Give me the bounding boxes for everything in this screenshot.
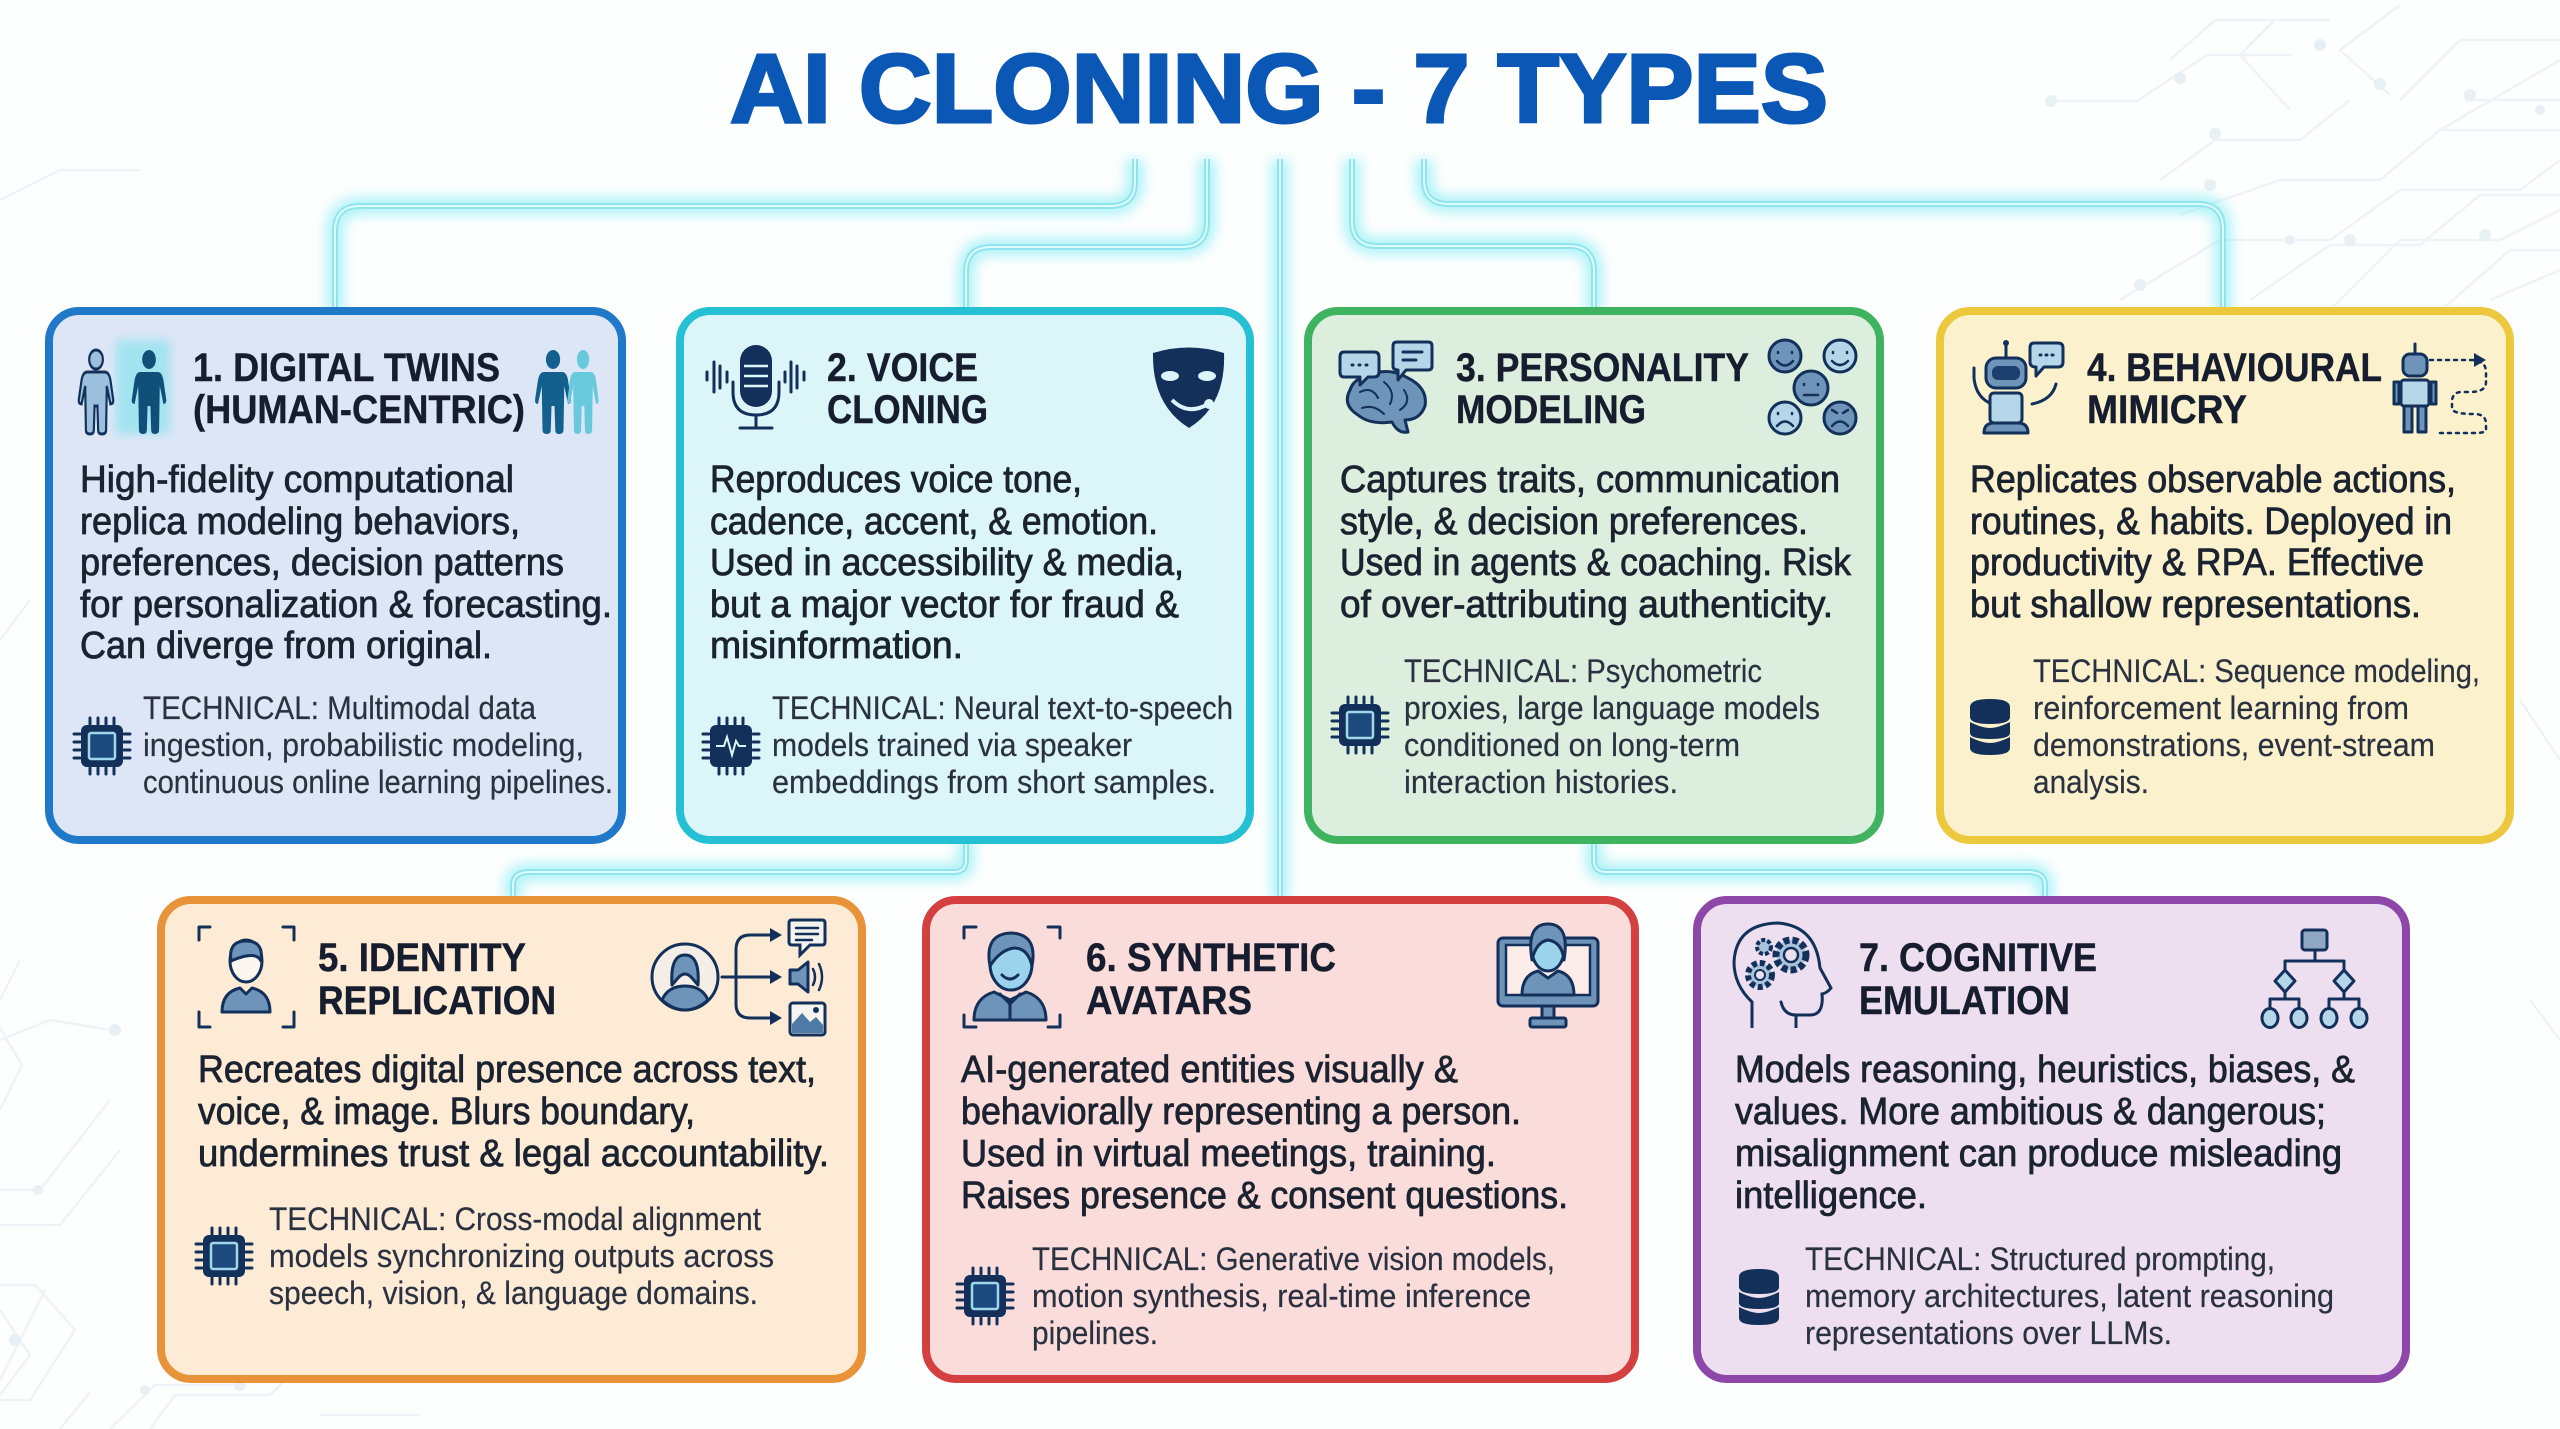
description: Captures traits, communication xyxy=(1340,459,1840,501)
technical note: reinforcement learning from xyxy=(2033,690,2409,726)
heading: AVATARS xyxy=(1086,979,1252,1023)
connector: title to digital twins xyxy=(335,159,1135,312)
description xyxy=(198,1049,829,1175)
description: routines, & habits. Deployed in xyxy=(1970,501,2452,543)
heading: 2. VOICE xyxy=(827,346,978,390)
heading xyxy=(193,346,525,432)
heading: 4. BEHAVIOURAL xyxy=(2087,346,2382,390)
heading: 3. PERSONALITY xyxy=(1456,346,1749,390)
description xyxy=(710,459,1184,667)
panel: 2. voice cloning xyxy=(680,311,1250,840)
technical note: models synchronizing outputs across xyxy=(269,1238,774,1274)
icon: database xyxy=(1970,699,2010,755)
icon: avatar in scan frame xyxy=(964,927,1060,1027)
description: undermines trust & legal accountability. xyxy=(198,1133,829,1175)
description: misalignment can produce misleading xyxy=(1735,1133,2342,1175)
description: Replicates observable actions, xyxy=(1970,459,2456,501)
technical note: analysis. xyxy=(2033,764,2149,800)
description: behaviorally representing a person. xyxy=(961,1091,1521,1133)
technical note: TECHNICAL: Multimodal data xyxy=(143,690,536,726)
icon: twin figures xyxy=(535,350,599,434)
technical note: TECHNICAL: Structured prompting, xyxy=(1805,1241,2275,1277)
icon: emotion faces xyxy=(1769,340,1856,434)
icon: chip xyxy=(957,1268,1013,1324)
technical note: conditioned on long-term xyxy=(1404,727,1740,763)
description: intelligence. xyxy=(1735,1175,1927,1217)
icon: brain with speech bubbles xyxy=(1340,342,1432,432)
icon: mask xyxy=(1153,348,1224,428)
icon: chip xyxy=(74,718,130,774)
icon: waveform chip xyxy=(703,718,759,774)
connector: voice cloning to identity replication xyxy=(513,840,966,900)
connector: title to behavioural mimicry xyxy=(1424,159,2223,312)
icon: chip xyxy=(196,1228,252,1284)
description xyxy=(1735,1049,2355,1217)
icon: chip xyxy=(1332,697,1388,753)
icon: microphone with sound waves xyxy=(707,345,804,428)
description: AI-generated entities visually & xyxy=(961,1049,1458,1091)
description: style, & decision preferences. xyxy=(1340,501,1808,543)
technical note xyxy=(772,690,1233,800)
description: Used in accessibility & media, xyxy=(710,542,1184,584)
description xyxy=(80,459,612,667)
heading: 7. COGNITIVE xyxy=(1859,936,2097,980)
description: High-fidelity computational xyxy=(80,459,514,501)
description: for personalization & forecasting. xyxy=(80,584,612,626)
heading: MIMICRY xyxy=(2087,388,2247,432)
technical note: proxies, large language models xyxy=(1404,690,1820,726)
heading xyxy=(1086,936,1336,1023)
heading xyxy=(2087,346,2382,432)
description: misinformation. xyxy=(710,625,963,667)
description xyxy=(1970,459,2456,626)
heading xyxy=(1859,936,2097,1023)
description: of over-attributing authenticity. xyxy=(1340,584,1833,626)
description: Used in agents & coaching. Risk xyxy=(1340,542,1852,584)
description: cadence, accent, & emotion. xyxy=(710,501,1158,543)
description xyxy=(961,1049,1568,1217)
technical note: representations over LLMs. xyxy=(1805,1315,2172,1351)
icon: avatar on monitor xyxy=(1498,924,1598,1027)
technical note: TECHNICAL: Cross-modal alignment xyxy=(269,1201,761,1237)
heading: REPLICATION xyxy=(318,979,556,1023)
technical note: memory architectures, latent reasoning xyxy=(1805,1278,2334,1314)
icon: human and digital twin xyxy=(79,340,170,434)
connector: title to synthetic avatars xyxy=(1271,159,1289,900)
description: Reproduces voice tone, xyxy=(710,459,1082,501)
description: Raises presence & consent questions. xyxy=(961,1175,1568,1217)
panel: 4. behavioural mimicry xyxy=(1940,311,2510,840)
technical note xyxy=(2033,653,2480,800)
description: voice, & image. Blurs boundary, xyxy=(198,1091,695,1133)
heading xyxy=(827,346,988,432)
description: but a major vector for fraud & xyxy=(710,584,1179,626)
connector: title to voice cloning xyxy=(966,159,1207,312)
heading: 5. IDENTITY xyxy=(318,936,526,980)
icon: robot with speech bubble xyxy=(1974,340,2063,433)
heading: MODELING xyxy=(1456,388,1646,432)
technical note xyxy=(143,690,613,800)
panel: 1. digital twins xyxy=(49,311,622,840)
technical note xyxy=(1805,1241,2334,1351)
panel: 3. personality modeling xyxy=(1308,311,1880,840)
heading: 6. SYNTHETIC xyxy=(1086,936,1336,980)
panel: 6. synthetic avatars xyxy=(926,900,1635,1379)
description xyxy=(1340,459,1852,626)
description: values. More ambitious & dangerous; xyxy=(1735,1091,2326,1133)
technical note: TECHNICAL: Neural text-to-speech xyxy=(772,690,1233,726)
technical note: TECHNICAL: Sequence modeling, xyxy=(2033,653,2480,689)
technical note xyxy=(1032,1241,1555,1351)
description: Used in virtual meetings, training. xyxy=(961,1133,1496,1175)
panel: 7. cognitive emulation xyxy=(1697,900,2406,1379)
technical note: continuous online learning pipelines. xyxy=(143,764,613,800)
technical note: pipelines. xyxy=(1032,1315,1158,1351)
technical note: embeddings from short samples. xyxy=(772,764,1216,800)
title: AI CLONING - 7 TYPES xyxy=(730,34,1828,143)
heading: CLONING xyxy=(827,388,988,432)
technical note: TECHNICAL: Generative vision models, xyxy=(1032,1241,1555,1277)
icon: person in scan frame xyxy=(199,927,294,1027)
description: Models reasoning, heuristics, biases, & xyxy=(1735,1049,2355,1091)
technical note: motion synthesis, real-time inference xyxy=(1032,1278,1531,1314)
technical note: models trained via speaker xyxy=(772,727,1132,763)
description: preferences, decision patterns xyxy=(80,542,564,584)
technical note: demonstrations, event-stream xyxy=(2033,727,2435,763)
heading: 1. DIGITAL TWINS xyxy=(193,346,500,390)
circuit pattern: bottom left xyxy=(0,170,420,1429)
technical note: interaction histories. xyxy=(1404,764,1678,800)
icon: database xyxy=(1739,1269,1779,1325)
description: productivity & RPA. Effective xyxy=(1970,542,2424,584)
circuit pattern: top right xyxy=(2045,5,2560,1040)
heading xyxy=(1456,346,1749,432)
panel: 5. identity replication xyxy=(161,900,862,1379)
heading xyxy=(318,936,556,1023)
description: Can diverge from original. xyxy=(80,625,492,667)
heading: (HUMAN-CENTRIC) xyxy=(193,388,525,432)
description: Recreates digital presence across text, xyxy=(198,1049,816,1091)
connector: title to personality modeling xyxy=(1352,159,1594,312)
icon: head with gears xyxy=(1734,923,1831,1028)
icon: decision tree xyxy=(2262,930,2367,1028)
icon: identity branching to text, voice and image xyxy=(652,920,825,1035)
description: replica modeling behaviors, xyxy=(80,501,520,543)
technical note xyxy=(269,1201,774,1311)
technical note: speech, vision, & language domains. xyxy=(269,1275,758,1311)
heading: EMULATION xyxy=(1859,979,2070,1023)
description: but shallow representations. xyxy=(1970,584,2421,626)
technical note xyxy=(1404,653,1820,800)
icon: robot following path xyxy=(2394,344,2486,433)
technical note: TECHNICAL: Psychometric xyxy=(1404,653,1762,689)
technical note: ingestion, probabilistic modeling, xyxy=(143,727,584,763)
connector: personality modeling to cognitive emulation xyxy=(1594,840,2045,900)
